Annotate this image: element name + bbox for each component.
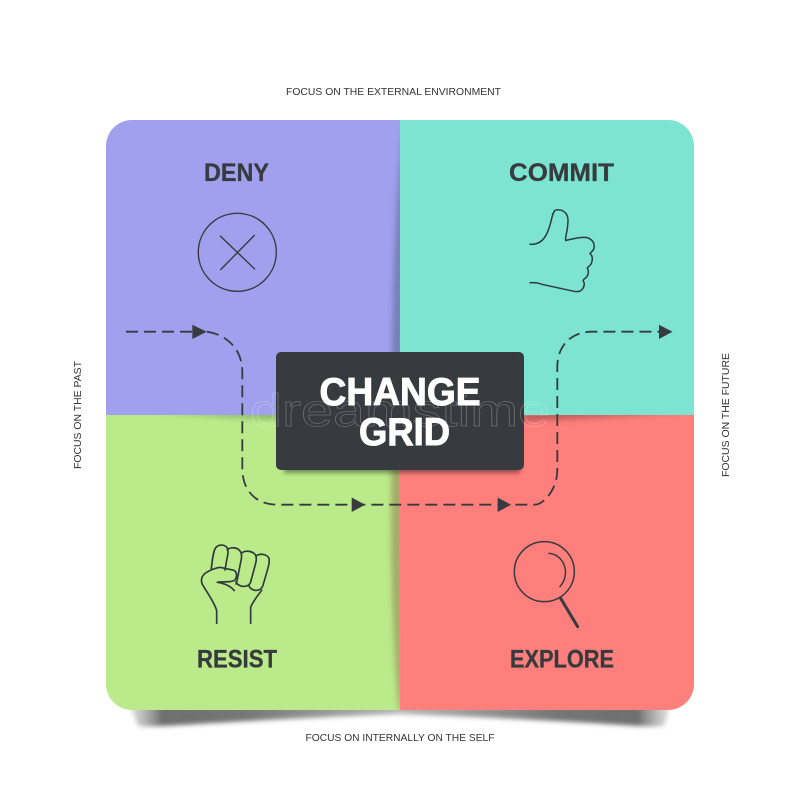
fold shadow on resist panel right edge: [388, 470, 400, 710]
center title box: [276, 352, 524, 470]
icon: cross in circle: [198, 213, 276, 291]
heading: commit: COMMIT: [509, 159, 614, 187]
panel: explore: [400, 415, 694, 710]
arrowhead: bottom left: [352, 498, 365, 512]
axis label: bottom: FOCUS ON INTERNALLY ON THE SELF: [306, 732, 494, 744]
center box shadow: [284, 464, 520, 473]
icon: magnifying glass: [514, 542, 578, 627]
fold shadow on deny panel: [389, 140, 400, 352]
title: grid: GRID: [359, 411, 450, 454]
fold shadow on explore panel: [524, 415, 664, 424]
title: change: CHANGE: [320, 371, 480, 414]
icon: thumbs up: [530, 210, 594, 292]
matrix panels: [106, 120, 694, 710]
heading: resist: RESIST: [197, 646, 277, 674]
axis label: left: FOCUS ON THE PAST: [72, 360, 84, 469]
heading: explore: EXPLORE: [510, 646, 614, 674]
icon: raised fist: [201, 545, 269, 623]
panel: resist: [106, 415, 400, 710]
panel: commit: [400, 120, 694, 415]
arrowhead: exit: [659, 325, 672, 339]
arrowhead: bottom right: [498, 498, 511, 512]
heading: deny: DENY: [204, 159, 269, 187]
arrowhead: entry: [192, 325, 207, 339]
panel: deny: [106, 120, 400, 415]
watermark: dreamstime: [250, 385, 550, 436]
ground shadow under grid: [130, 706, 670, 726]
fold shadow on resist panel: [172, 415, 276, 422]
dashed arrow path: [126, 325, 672, 512]
axis label: top: FOCUS ON THE EXTERNAL ENVIRONMENT: [286, 86, 502, 98]
axis label: right: FOCUS ON THE FUTURE: [720, 353, 732, 477]
